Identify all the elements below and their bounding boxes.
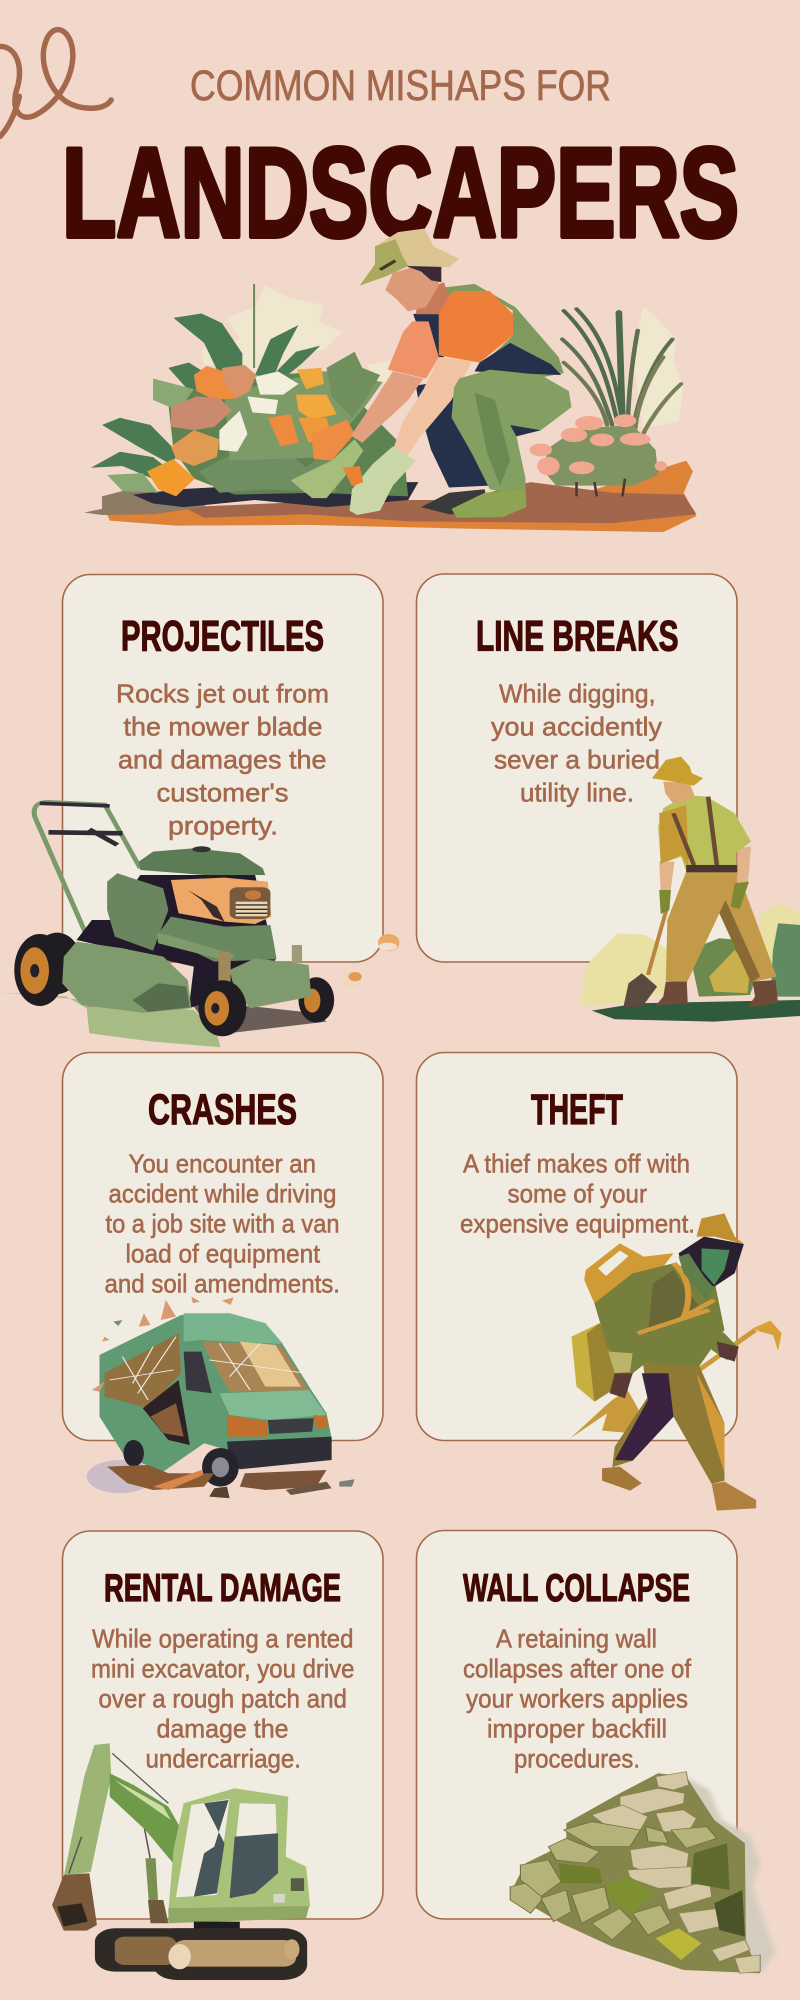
text: line breaks description: While digging, (499, 678, 656, 708)
leafy plants (91, 314, 320, 482)
boom arm (64, 1743, 111, 1877)
text: crashes description: and soil amendments. (104, 1268, 340, 1298)
flying rocks (378, 934, 399, 951)
trousers (666, 870, 777, 984)
wheels (202, 1448, 239, 1487)
text: rental damage description (91, 1624, 354, 1774)
icon: thief carrying equipment (570, 1213, 782, 1511)
text: wall collapse description: procedures. (514, 1744, 640, 1774)
neck and face (416, 282, 449, 314)
scarf (679, 1253, 714, 1300)
hook tool (699, 1330, 755, 1370)
flowers (194, 366, 255, 400)
text: projectiles description: customer's (156, 778, 288, 808)
engine hood (139, 848, 265, 875)
ground (107, 461, 696, 532)
right rear wheel (298, 977, 334, 1023)
text: wall collapse description (463, 1624, 692, 1774)
text: theft description: A thief makes off with (463, 1148, 690, 1178)
face (663, 782, 695, 803)
window right (230, 1803, 278, 1898)
icon: wrecked van (87, 1297, 355, 1498)
text: rental damage description: While operating a rented (92, 1624, 354, 1654)
handle (34, 802, 140, 942)
window left (176, 1799, 230, 1897)
exhausts (218, 952, 231, 982)
text: projectiles description: and damages the (118, 744, 326, 774)
text: rental damage description: damage the (156, 1714, 288, 1744)
text: line breaks description: utility line. (520, 778, 634, 808)
text: theft description: expensive equipment. (460, 1208, 695, 1238)
bumper (227, 1437, 332, 1469)
panel: crashes (62, 1052, 383, 1440)
bushes (581, 933, 668, 1007)
flying shards (92, 1297, 234, 1392)
text: theft description: some of your (508, 1178, 647, 1208)
text: crashes description (104, 1148, 340, 1298)
gold tools (570, 1390, 639, 1438)
cylinder (145, 1858, 158, 1903)
panel: wall collapse (416, 1530, 737, 1919)
text: crashes description: to a job site with a van (106, 1208, 340, 1238)
arms (659, 862, 674, 892)
deck (62, 942, 191, 1013)
boots (421, 489, 490, 514)
heading: rental damage: RENTAL DAMAGE (104, 1567, 341, 1610)
title: common mishaps for: COMMON MISHAPS FOR (190, 62, 611, 110)
heading: wall collapse: WALL COLLAPSE (463, 1567, 690, 1610)
stolen box (571, 1323, 638, 1402)
decorative squiggle (0, 30, 111, 136)
mossy stones (605, 1877, 654, 1913)
stolen can (584, 1243, 673, 1307)
trousers shadow (416, 379, 490, 487)
text: crashes description: You encounter an (128, 1148, 316, 1178)
windshield (202, 1342, 309, 1392)
body (99, 1313, 332, 1472)
text: line breaks description: sever a buried (494, 744, 660, 774)
shirt (658, 795, 751, 872)
back arm (351, 371, 423, 443)
arm (704, 1327, 737, 1360)
torso (594, 1263, 724, 1373)
text: wall collapse description: collapses after one of (463, 1654, 692, 1684)
headlights (227, 1415, 268, 1437)
debris shadow (87, 1460, 153, 1493)
front wheel (198, 980, 246, 1036)
icon: mini excavator (52, 1743, 310, 1980)
foliage (689, 938, 755, 997)
text: line breaks description: you accidently (491, 712, 662, 742)
boots (602, 1467, 642, 1491)
text: rental damage description: over a rough patch and (98, 1684, 347, 1714)
dense flower bed base (168, 371, 408, 496)
heading: line breaks: LINE BREAKS (476, 612, 678, 660)
legs (612, 1363, 724, 1484)
orange bloom in hand (343, 466, 363, 486)
rope straps (638, 1263, 714, 1333)
pale background foliage (202, 286, 342, 371)
text: line breaks description (491, 678, 662, 808)
text: rental damage description: undercarriage. (146, 1744, 301, 1774)
grass and shadow (0, 992, 220, 1047)
grille (268, 1418, 314, 1434)
hat (375, 229, 459, 268)
vest (444, 284, 564, 379)
rear wheel (33, 933, 82, 994)
tracks (95, 1928, 217, 1972)
text: theft description (460, 1148, 695, 1238)
icon: man with shovel (581, 757, 800, 1022)
text: wall collapse description: A retaining wall (496, 1624, 657, 1654)
gloves (659, 890, 671, 914)
heading: projectiles: PROJECTILES (121, 612, 324, 660)
front arm (393, 357, 472, 459)
base heap (510, 1773, 760, 1973)
white haze at the edge (684, 1777, 776, 1973)
icon: lawn mower (0, 802, 399, 1047)
main boom (110, 1773, 182, 1867)
cab body (168, 1788, 310, 1912)
pink shrub (541, 425, 658, 486)
trousers (452, 370, 571, 496)
panel: line breaks (416, 574, 737, 962)
shovel (648, 910, 666, 975)
orange engine (171, 878, 271, 924)
side panel (107, 873, 168, 951)
debris (107, 1465, 214, 1490)
hat (696, 1213, 744, 1244)
text: projectiles description (116, 678, 329, 840)
panel: theft (416, 1052, 737, 1440)
shirt (439, 291, 513, 362)
text: crashes description: accident while driving (108, 1178, 336, 1208)
illustration: gardener planting flowers (84, 229, 696, 532)
dark chassis (77, 875, 276, 1008)
text: crashes description: load of equipment (126, 1238, 321, 1268)
hood and face (679, 1237, 744, 1287)
heading: crashes: CRASHES (148, 1086, 297, 1134)
ground (592, 1000, 800, 1022)
panel: rental damage (62, 1531, 383, 1919)
boots (656, 982, 688, 1006)
text: projectiles description: Rocks jet out from (116, 678, 329, 708)
base (168, 1906, 309, 1923)
stalk (252, 284, 256, 368)
text: projectiles description: property. (168, 810, 278, 840)
hat (652, 757, 703, 786)
front deck (230, 958, 311, 1008)
broken side window (105, 1333, 181, 1408)
panel: projectiles (62, 574, 383, 962)
tall grass on right (562, 309, 681, 446)
text: projectiles description: the mower blade (124, 712, 322, 742)
side damage (143, 1380, 190, 1445)
text: wall collapse description: improper backfill (487, 1714, 667, 1744)
icon: collapsed retaining wall (510, 1772, 776, 1973)
lower body (158, 917, 277, 962)
olive stones (510, 1822, 717, 1940)
bucket (52, 1873, 97, 1931)
vent (291, 1878, 304, 1891)
text: wall collapse description: your workers applies (466, 1684, 688, 1714)
gloves (291, 439, 363, 498)
torso dark (413, 307, 444, 357)
heading: theft: THEFT (531, 1086, 623, 1134)
suspenders and belt (673, 797, 717, 865)
upper tan blocks (592, 1772, 760, 1973)
door window (184, 1352, 212, 1393)
text: rental damage description: mini excavator, you drive (91, 1654, 354, 1684)
